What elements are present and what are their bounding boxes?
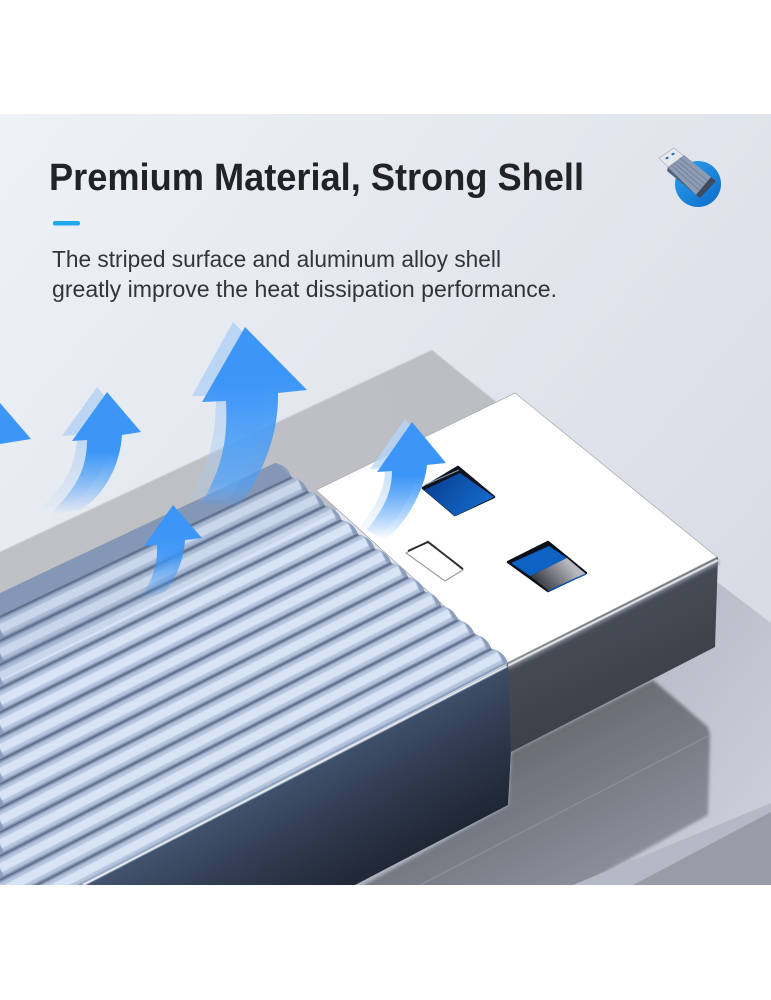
ribbed aluminium body [0, 463, 511, 916]
connector: metal side [507, 557, 718, 752]
arrow: small left [40, 387, 141, 514]
arrow: left edge [0, 403, 31, 444]
background panel [0, 114, 771, 885]
connector: white top face [316, 393, 717, 663]
arrow: over connector [360, 419, 446, 540]
connector slot: blue and grey [508, 542, 586, 591]
description text: The striped surface and aluminum alloy shell [52, 246, 501, 272]
connector slot: top blue [423, 467, 494, 516]
shadow block under connector [355, 680, 710, 890]
arrow: over ribs [134, 502, 202, 600]
lower right dark plate [573, 803, 771, 885]
description text [52, 246, 557, 302]
body front edge highlight [83, 666, 507, 885]
striped top surface [0, 463, 510, 916]
icon: USB adapter on blue disc [659, 148, 721, 207]
description text: greatly improve the heat dissipation performance. [52, 276, 557, 302]
arrow: large centre [188, 322, 307, 505]
body side face [83, 664, 511, 885]
connector slot: white [406, 541, 463, 581]
title: Premium Material, Strong Shell [49, 157, 584, 199]
accent bar [53, 221, 80, 226]
lower support plate [355, 582, 771, 885]
translucent grey plate behind connector [0, 350, 520, 610]
